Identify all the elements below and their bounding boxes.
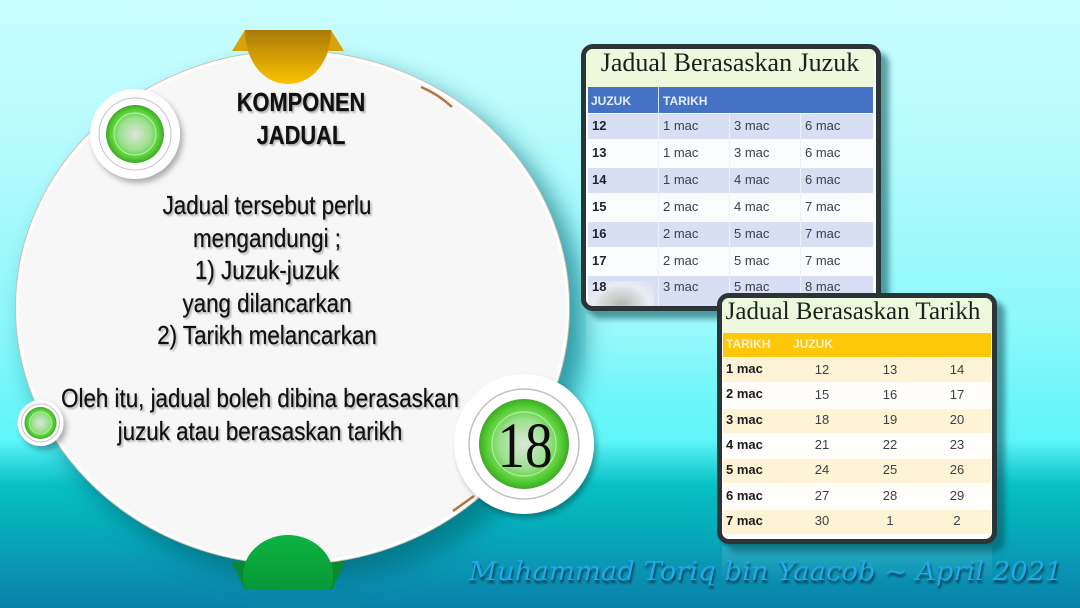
text block: conclusion: Oleh itu, jadual boleh dibina berasaskan (61, 383, 459, 413)
table title: Jadual Berasaskan Juzuk (601, 48, 859, 77)
panel: juzuk table: 3 mac (734, 145, 769, 160)
panel: tarikh table: 24 (815, 462, 829, 477)
panel: tarikh table: 15 (815, 387, 829, 402)
panel: juzuk table: 18 (592, 279, 606, 294)
text block: conclusion: juzuk atau berasaskan tarikh (118, 416, 402, 446)
panel: tarikh table: 3 mac (726, 412, 763, 427)
panel: juzuk table: 7 mac (805, 226, 840, 241)
icon: upper green button (90, 89, 180, 179)
panel: juzuk table: 3 mac (663, 279, 698, 294)
panel: tarikh table: 13 (883, 362, 897, 377)
panel: juzuk table: 1 mac (663, 145, 698, 160)
panel: juzuk table: 5 mac (734, 253, 769, 268)
panel: juzuk table: 4 mac (734, 172, 769, 187)
panel: juzuk table: 16 (592, 226, 606, 241)
panel: juzuk table (581, 44, 881, 311)
panel: tarikh table (717, 293, 997, 544)
panel: juzuk table: 6 mac (805, 172, 840, 187)
panel: tarikh table: 12 (815, 362, 829, 377)
panel: tarikh table: 18 (815, 412, 829, 427)
panel: juzuk table: TARIKH (663, 94, 707, 108)
text block: conclusion (61, 383, 460, 448)
icon: number 18 badge (454, 374, 594, 514)
text block: table contents: Jadual tersebut perlu (163, 190, 371, 220)
panel: juzuk table: 6 mac (805, 118, 840, 133)
panel: tarikh table: 14 (950, 362, 964, 377)
panel: juzuk table: 2 mac (663, 226, 698, 241)
panel: juzuk table: 7 mac (805, 199, 840, 214)
panel: juzuk table: 7 mac (805, 253, 840, 268)
panel: juzuk table: 5 mac (734, 226, 769, 241)
panel: tarikh table: 20 (950, 412, 964, 427)
panel: juzuk table: 15 (592, 199, 606, 214)
heading: KOMPONEN (237, 87, 365, 117)
panel: tarikh table: 1 mac (726, 361, 763, 376)
panel: tarikh table: 25 (883, 462, 897, 477)
panel: juzuk table: JUZUK (591, 94, 631, 108)
panel: tarikh table: 2 mac (726, 386, 763, 401)
panel: tarikh table: 28 (883, 488, 897, 503)
heading: JADUAL (257, 120, 345, 150)
panel: tarikh table: 30 (815, 513, 829, 528)
brown arc marks (421, 87, 452, 107)
panel: tarikh table: 27 (815, 488, 829, 503)
table header (723, 333, 991, 357)
green tab back (232, 562, 345, 590)
panel: tarikh table: 22 (883, 437, 897, 452)
panel: tarikh table: 4 mac (726, 437, 763, 452)
panel: tarikh table: JUZUK (793, 337, 833, 351)
table header (588, 87, 873, 113)
panel: juzuk table: 2 mac (663, 199, 698, 214)
signature: Muhammad Toriq bin Yaacob ~ April 2021 (469, 557, 1063, 587)
gold half circle (245, 30, 331, 84)
panel: tarikh table: 17 (950, 387, 964, 402)
panel: juzuk table: 13 (592, 145, 606, 160)
heading (237, 87, 366, 150)
text block: table contents: mengandungi ; (193, 222, 341, 252)
panel: juzuk table: 1 mac (663, 172, 698, 187)
panel: juzuk table: 12 (592, 118, 606, 133)
text block: table contents: 2) Tarikh melancarkan (157, 320, 377, 350)
panel: tarikh table: 7 mac (726, 513, 763, 528)
panel: tarikh table: 1 (886, 513, 894, 528)
panel: tarikh table: 23 (950, 437, 964, 452)
panel: tarikh table: 29 (950, 488, 964, 503)
table title: Jadual Berasaskan Tarikh (726, 298, 980, 325)
text block: table contents: yang dilancarkan (182, 288, 352, 318)
green half circle (243, 535, 333, 590)
panel: tarikh table: 19 (883, 412, 897, 427)
icon: small green button (18, 400, 64, 446)
panel: juzuk table: 1 mac (663, 118, 698, 133)
shadow under circle (26, 64, 586, 580)
gold tab back (232, 30, 344, 51)
white circle (16, 50, 570, 564)
panel: juzuk table: 3 mac (734, 118, 769, 133)
panel: juzuk table: 4 mac (734, 199, 769, 214)
panel: tarikh table: 2 (953, 513, 961, 528)
panel: tarikh table: 6 mac (726, 488, 763, 503)
reflection of juzuk table (586, 314, 718, 384)
panel: tarikh table: 16 (883, 387, 897, 402)
panel: tarikh table: 5 mac (726, 462, 763, 477)
panel: juzuk table: 8 mac (805, 279, 840, 294)
text block: table contents: 1) Juzuk-juzuk (195, 255, 339, 285)
table title (586, 49, 874, 87)
panel: juzuk table: 14 (592, 172, 606, 187)
panel: juzuk table: 2 mac (663, 253, 698, 268)
panel: juzuk table: 17 (592, 253, 606, 268)
panel: juzuk table: 5 mac (734, 279, 769, 294)
icon: number 18 badge: 18 (497, 410, 553, 482)
panel: tarikh table: TARIKH (726, 337, 770, 351)
panel: juzuk table: 6 mac (805, 145, 840, 160)
text block: table contents (157, 190, 378, 352)
panel: tarikh table: 21 (815, 437, 829, 452)
reflection of tarikh table (722, 546, 992, 580)
panel: tarikh table: 26 (950, 462, 964, 477)
